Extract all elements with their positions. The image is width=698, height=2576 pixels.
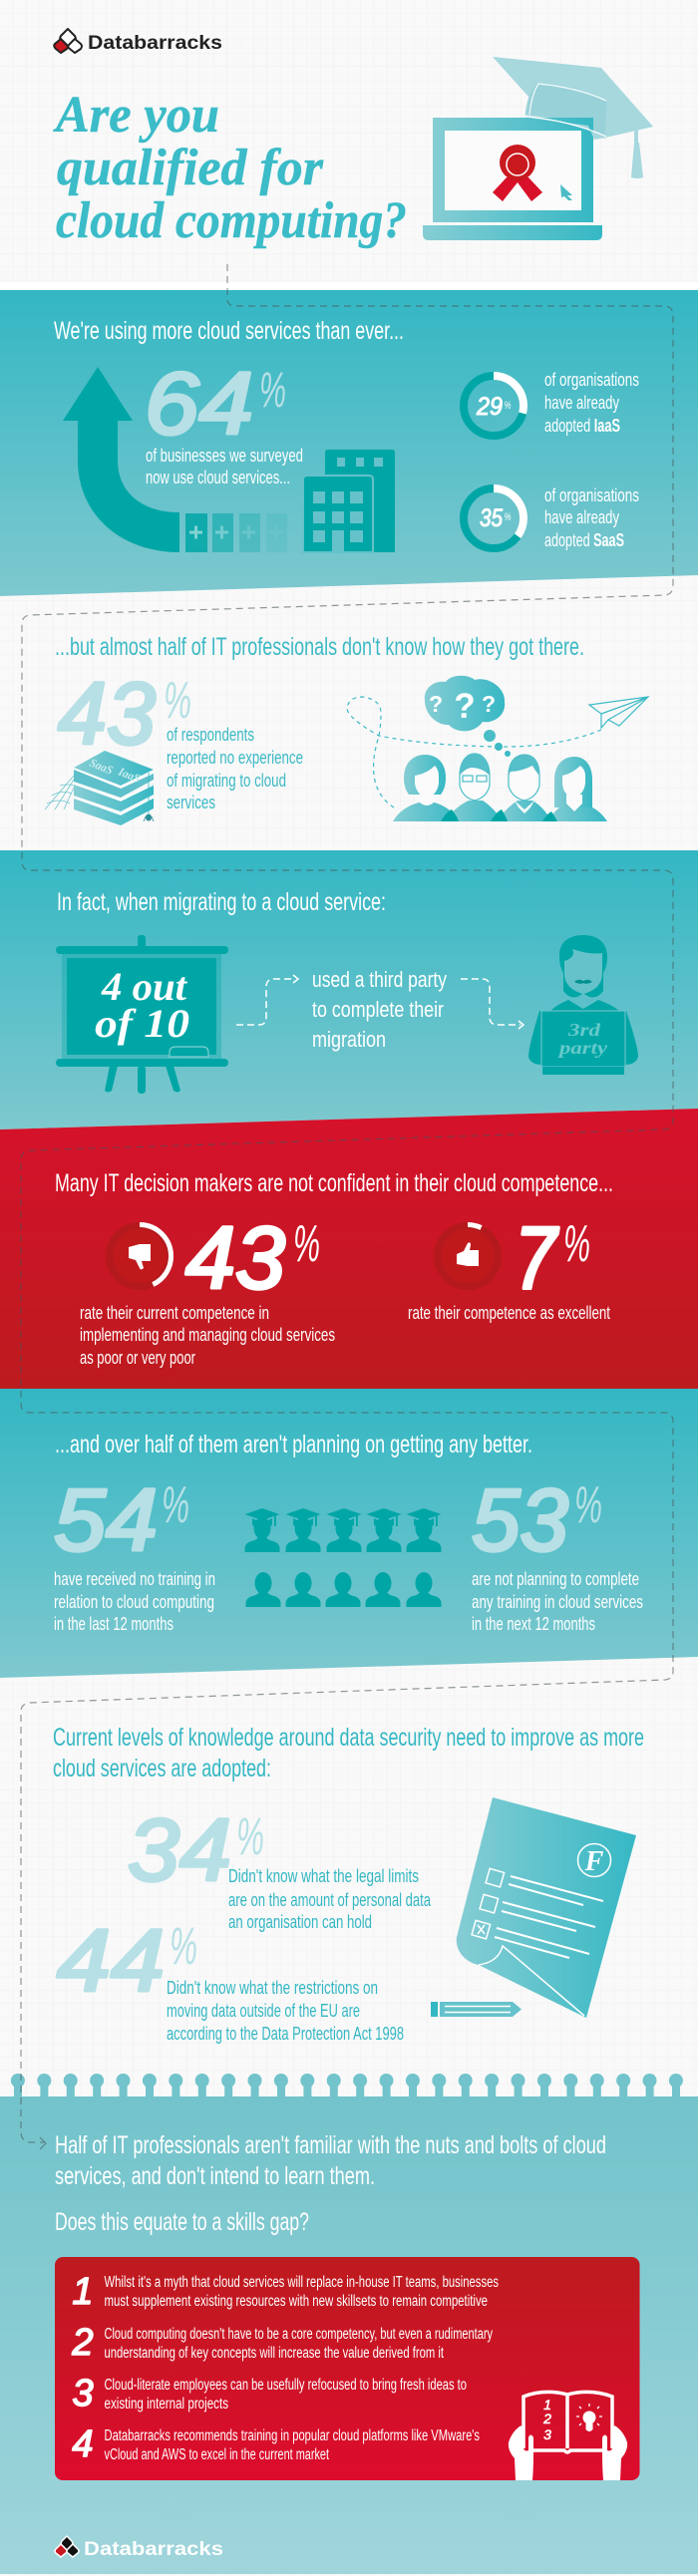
text: legal limits: are on the amount of personal data: [228, 1889, 431, 1910]
icon: open book held in hands: 2: [542, 2411, 551, 2426]
logo: Databarracks header: Databarracks: [88, 32, 222, 54]
panel: don't know how they got there: [45, 633, 648, 825]
logo: Databarracks header: [54, 29, 222, 54]
text: restrictions: according to the Data Protection Act 1998: [167, 2023, 404, 2044]
list text: Cloud-literate employees can be usefully refocused to bring fresh ideas to: [104, 2377, 467, 2394]
title: [53, 87, 407, 249]
stat: 53%: %: [574, 1476, 602, 1534]
icon: group of four people: [393, 754, 607, 821]
icon: open book held in hands: 1: [543, 2397, 551, 2413]
icon: open book held in hands: 3: [543, 2426, 551, 2442]
text: used a third party: used a third party: [312, 967, 448, 992]
arrow: board to text: [236, 975, 298, 1025]
icon: thought bubble with question marks: ?: [454, 687, 476, 726]
list text: must supplement existing resources with new skillsets to remain competitive: [104, 2293, 488, 2310]
text: restrictions: [167, 1977, 404, 2044]
text: respondents: reported no experience: [167, 747, 303, 768]
text: no training: relation to cloud computing: [54, 1591, 214, 1612]
stat: 44%: 44: [57, 1911, 165, 2010]
list text: vCloud and AWS to excel in the current market: [104, 2446, 329, 2463]
stat: 34%: 34: [128, 1800, 231, 1899]
icon: checklist document: [457, 1797, 636, 2018]
numbers: 4: [72, 2423, 94, 2465]
text: respondents: of migrating to cloud: [167, 770, 286, 791]
stat: 64%: [145, 354, 286, 453]
chart: 29% donut: %: [505, 400, 512, 412]
icon: presentation board: of 10: [95, 1001, 189, 1046]
panel: data security knowledge: [53, 1724, 644, 2044]
stat: 43%: %: [164, 672, 191, 730]
stat: 54%: 54: [54, 1470, 158, 1569]
text: used a third party: migration: [312, 1027, 386, 1052]
text: IaaS adoption: [544, 369, 639, 436]
text: IaaS adoption: of organisations: [544, 369, 639, 390]
text: IaaS adoption: have already: [544, 392, 620, 413]
text: SaaS adoption: of organisations: [544, 484, 639, 505]
stat: 54%: %: [162, 1476, 189, 1534]
icon: thought bubble with question marks: [425, 676, 511, 757]
text: legal limits: [228, 1865, 431, 1932]
panel: when migrating: [0, 850, 698, 1129]
text: legal limits: an organisation can hold: [228, 1911, 372, 1932]
stat: 43% white: 43: [185, 1208, 285, 1307]
text: used a third party: to complete their: [312, 997, 444, 1022]
icon: people row: [245, 1572, 441, 1607]
icon: thought bubble with question marks: ?: [482, 691, 496, 717]
stat: 7%: %: [563, 1215, 590, 1273]
white band above first panel: [0, 282, 698, 290]
stat: 44%: %: [170, 1917, 197, 1976]
heading: [53, 1724, 644, 1782]
logo: Databarracks footer: Databarracks: [84, 2538, 223, 2560]
title: cloud computing?: [56, 192, 407, 249]
stat: 44%: [57, 1911, 197, 2010]
list text: Cloud computing doesn't have to be a core competency, but even a rudimentary: [104, 2326, 493, 2343]
stat: 53%: 53: [472, 1470, 568, 1569]
stat: 43%: 43: [58, 664, 156, 763]
text: used a third party: [312, 967, 448, 1052]
heading: cloud services are adopted:: [53, 1755, 271, 1782]
text: SaaS adoption: have already: [544, 506, 620, 527]
icon: presentation board: 4 out: [101, 964, 188, 1009]
logo: Databarracks footer: [55, 2536, 223, 2560]
icon: pencil: [431, 2002, 522, 2017]
heading: [55, 2131, 606, 2190]
chart: 29% donut: [464, 376, 524, 436]
heading: We're using more cloud services than ever...: [54, 317, 404, 345]
chart: 7% thumbs up gauge: [434, 1222, 502, 1290]
text: no training: [54, 1568, 215, 1634]
icon: paper plane with dashed loop: [347, 697, 648, 807]
text: businesses surveyed: [146, 445, 303, 487]
chart: 35% donut: [464, 488, 524, 548]
stat: 34%: %: [236, 1807, 264, 1866]
arrow: dashed connector running through all panels: [21, 264, 673, 2149]
chart: 35% donut: %: [505, 511, 512, 523]
list text: existing internal projects: [104, 2396, 228, 2413]
text: rate poor: rate their current competence in: [80, 1302, 269, 1323]
text: respondents: of respondents: [167, 724, 254, 745]
panel: skills gap: [0, 2074, 698, 2574]
text: no training: have received no training in: [54, 1568, 215, 1589]
numbers: [71, 2271, 94, 2465]
panel: decision makers confidence: [0, 1109, 698, 1389]
list text: understanding of key concepts will increase the value derived from it: [104, 2345, 444, 2362]
title: Are you: [53, 87, 219, 144]
icon: thumbs up: [457, 1242, 479, 1266]
panel: more cloud services: [0, 290, 698, 596]
icon: graduation cap on laptop with rosette: [423, 57, 653, 240]
icon: upward curved arrow with plus boxes: [63, 367, 287, 552]
text: businesses surveyed: of businesses we surveyed: [146, 445, 303, 466]
text: rate excellent: rate their competence as excellent: [408, 1302, 610, 1323]
list text: [104, 2274, 499, 2463]
list text: Whilst it's a myth that cloud services will replace in-house IT teams, businesses: [104, 2274, 499, 2291]
chart: 29% donut: 29: [476, 393, 503, 421]
text: SaaS adoption: [544, 484, 639, 550]
icon: third party person with laptop: party: [556, 1038, 608, 1058]
heading: services, and don't intend to learn them.: [55, 2162, 375, 2190]
callout: red list box: [55, 2257, 640, 2480]
panel: over half not planning: [0, 1389, 698, 1678]
subheading: Does this equate to a skills gap?: [55, 2208, 309, 2236]
arrow: text to third party: [461, 979, 524, 1029]
icon: graduates row: [245, 1508, 441, 1552]
icon: dusty book stack with cobweb and spider: [45, 751, 154, 825]
icon: thumbs down: [129, 1244, 151, 1270]
perforated keyhole top edge: [11, 2074, 683, 2097]
icon: dusty book stack with cobweb and spider: SaaS: [88, 756, 116, 778]
text: restrictions: Didn't know what the restrictions on: [167, 1977, 378, 1998]
text: rate poor: implementing and managing cloud services: [80, 1324, 335, 1345]
text: legal limits: Didn't know what the legal limits: [228, 1865, 419, 1886]
text: restrictions: moving data outside of the EU are: [167, 2000, 360, 2021]
stat: 7%: 7: [515, 1208, 559, 1307]
text: rate poor: [80, 1302, 335, 1368]
text: businesses surveyed: now use cloud services...: [146, 467, 290, 487]
text: rate poor: as poor or very poor: [80, 1347, 195, 1368]
numbers: 3: [72, 2373, 94, 2415]
icon: third party person with laptop: [528, 935, 638, 1075]
icon: third party person with laptop: 3rd: [567, 1020, 601, 1040]
text: no training: in the last 12 months: [54, 1613, 174, 1634]
icon: thought bubble with question marks: ?: [429, 691, 443, 717]
numbers: 2: [71, 2322, 94, 2364]
stat: 64%: %: [259, 362, 286, 418]
icon: open book held in hands: [509, 2392, 627, 2480]
icon: checklist document: F: [584, 1846, 604, 1877]
chart: 43% thumbs down gauge: [106, 1222, 174, 1290]
text: not planning: [472, 1568, 643, 1634]
chart: 35% donut: 35: [480, 504, 503, 532]
title: qualified for: [57, 140, 324, 196]
stat: 43% white: %: [293, 1215, 320, 1273]
text: SaaS adoption: adopted SaaS: [544, 529, 624, 550]
numbers: 1: [72, 2271, 94, 2313]
list text: Databarracks recommends training in popular cloud platforms like VMware's: [104, 2427, 480, 2444]
text: not planning: are not planning to complete: [472, 1568, 639, 1589]
text: respondents: [167, 724, 303, 812]
text: IaaS adoption: adopted IaaS: [544, 415, 620, 436]
stat: 7%: [515, 1208, 590, 1307]
stat: 64%: 64: [145, 354, 253, 453]
text: respondents: services: [167, 792, 215, 812]
icon: presentation board: [56, 935, 228, 1094]
icon: dusty book stack with cobweb and spider: IaaS: [116, 764, 143, 786]
icon: office building: [303, 450, 395, 552]
text: not planning: in the next 12 months: [472, 1613, 595, 1634]
heading: In fact, when migrating to a cloud service:: [57, 888, 386, 916]
